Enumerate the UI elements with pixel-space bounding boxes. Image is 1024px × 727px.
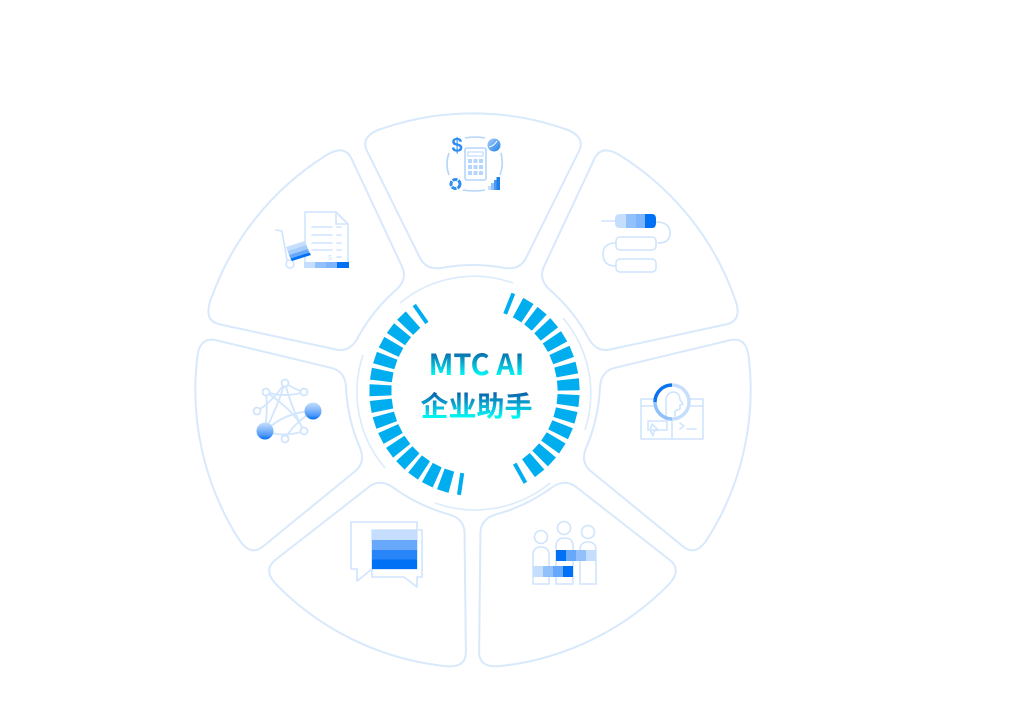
panel: upper left segment [189, 134, 444, 399]
icon: browser window with AI head [641, 385, 703, 439]
right tick arc [503, 293, 580, 484]
icon: network nodes [254, 380, 322, 442]
subtitle: 企业助手: 企业助手 [420, 385, 533, 425]
panel: top segment [365, 113, 581, 268]
panel: right segment [569, 312, 768, 557]
left tick arc [369, 304, 464, 495]
icon: team [533, 522, 596, 584]
icon: workflow pills [602, 214, 670, 272]
center ring arcs [357, 276, 591, 510]
panel: upper right segment [502, 134, 757, 399]
title: MTC AI: MTC AI [429, 342, 524, 384]
panel: lower left segment [257, 454, 518, 687]
icon: calculator and finance: $ [451, 135, 463, 157]
icon: chat bubbles [351, 522, 422, 587]
icon: shopping cart and invoice [276, 212, 349, 268]
icon: shopping cart and invoice: $ [328, 255, 332, 262]
panel: left segment [178, 312, 377, 557]
icon: calculator and finance [447, 135, 502, 191]
panel: lower right segment [427, 454, 688, 687]
